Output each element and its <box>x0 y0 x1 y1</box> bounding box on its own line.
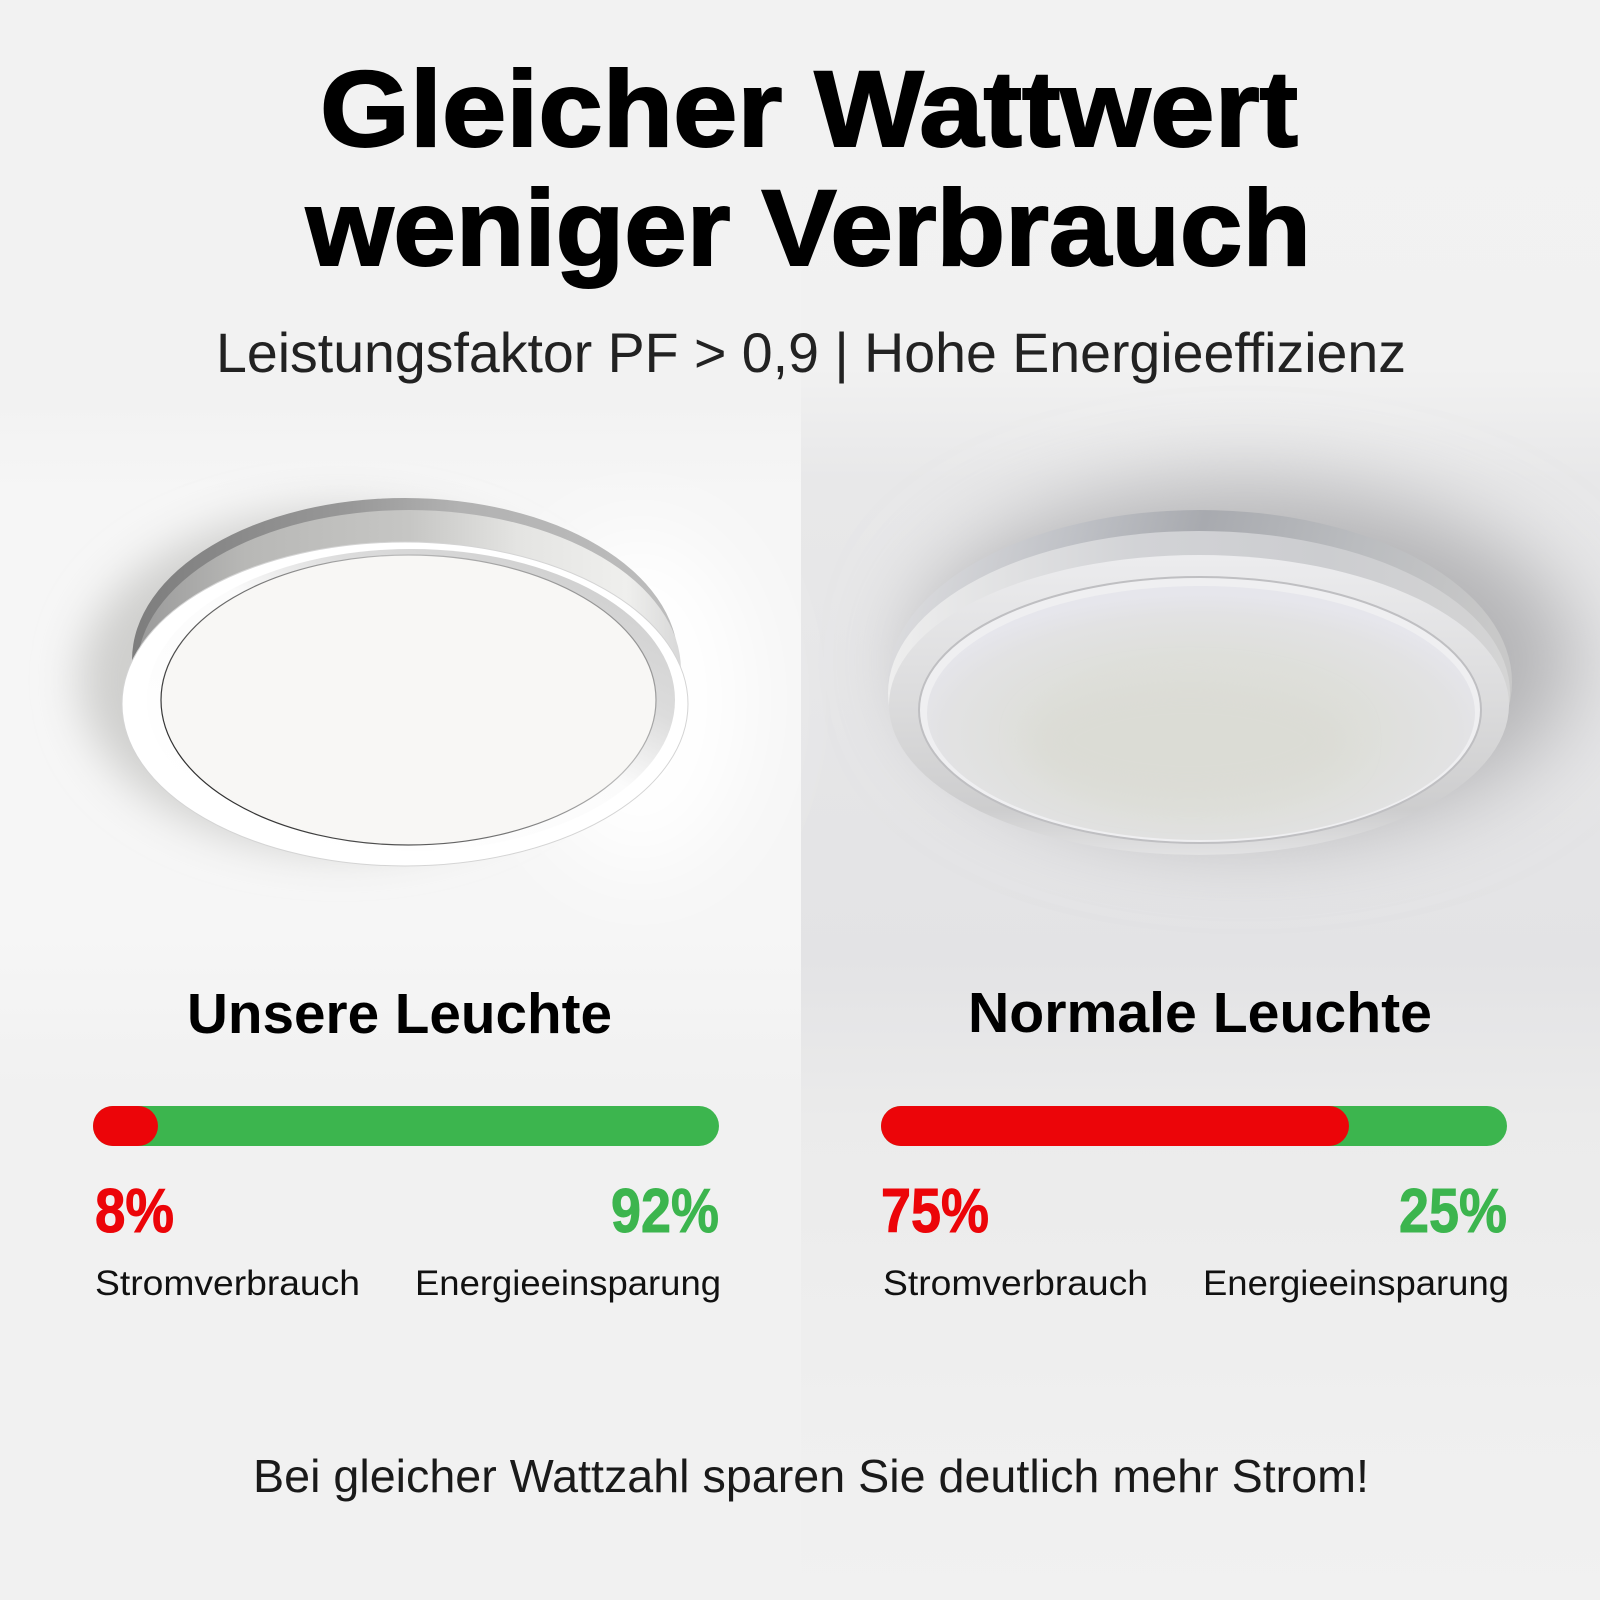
panel: left lamp, our light <box>80 498 750 870</box>
label: Stromverbrauch right: Stromverbrauch <box>883 1264 1148 1303</box>
lamp shadow <box>915 485 1575 835</box>
lamp housing <box>888 510 1512 854</box>
subtitle: Leistungsfaktor PF > 0,9 | Hohe Energieeffizienz <box>216 321 1406 384</box>
glow <box>530 530 750 870</box>
lamp front ring <box>122 542 688 866</box>
lamp housing middle band <box>888 531 1510 855</box>
panel: right lamp, normal light <box>888 485 1575 855</box>
label: Stromverbrauch left: Stromverbrauch <box>95 1264 360 1303</box>
lamp housing side <box>137 510 681 830</box>
title: weniger Verbrauch <box>305 167 1311 288</box>
lamp housing <box>132 498 678 822</box>
label: Energieeinsparung right: Energieeinsparung <box>1203 1264 1509 1303</box>
value: 25%: 25% <box>1399 1177 1507 1246</box>
bar chart: normal light 75/25 <box>881 1106 1507 1146</box>
lamp shadow <box>80 510 600 850</box>
lamp lens rim <box>919 577 1481 843</box>
heading: Normale Leuchte: Normale Leuchte <box>968 981 1432 1045</box>
bar chart: our light 8/92 <box>93 1106 719 1146</box>
value: 8%: 8% <box>95 1177 174 1246</box>
lamp front ring <box>889 555 1509 855</box>
lamp light disc <box>161 555 656 845</box>
footer text: Bei gleicher Wattzahl sparen Sie deutlich mehr Strom! <box>253 1450 1369 1502</box>
value: 75%: 75% <box>881 1177 989 1246</box>
value: 92%: 92% <box>611 1177 719 1246</box>
lamp inner wall <box>147 549 675 851</box>
label: Energieeinsparung left: Energieeinsparung <box>415 1264 721 1303</box>
title <box>305 48 1311 288</box>
lamp lens <box>927 586 1475 840</box>
lens glow <box>1030 680 1350 800</box>
heading: Unsere Leuchte: Unsere Leuchte <box>187 982 612 1046</box>
title: Gleicher Wattwert <box>320 48 1298 169</box>
